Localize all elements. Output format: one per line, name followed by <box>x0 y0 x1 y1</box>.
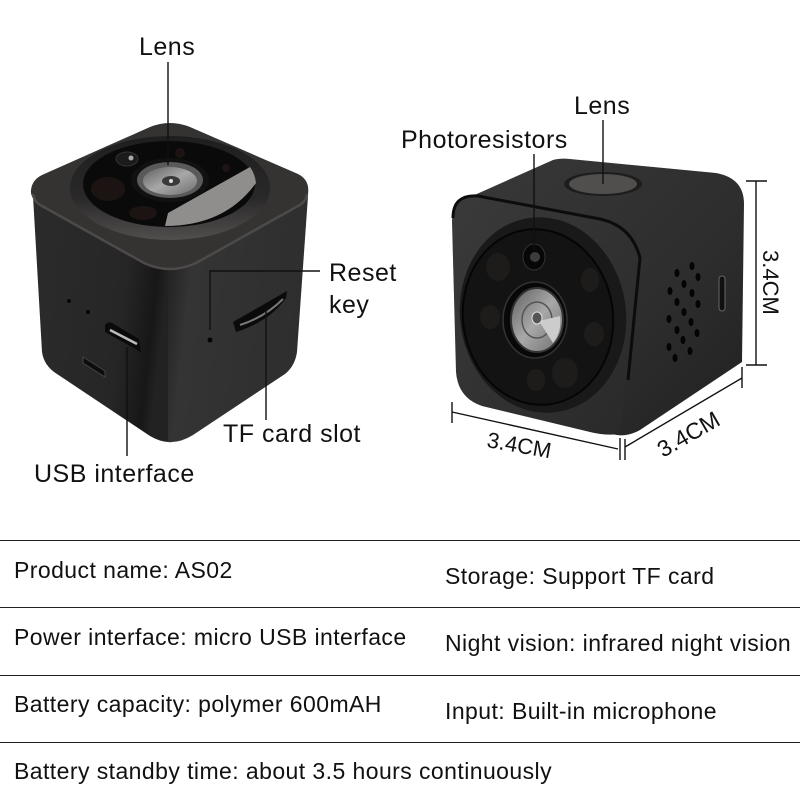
spec: battery capacity: Battery capacity: polymer 600mAH <box>14 691 382 717</box>
left camera: infrared LEDs <box>91 148 230 220</box>
label: Reset key: Reset <box>329 259 397 287</box>
right camera: front top edge <box>453 196 640 380</box>
right camera: top lens window <box>564 172 642 196</box>
right camera: side slot <box>719 276 725 311</box>
left camera: photoresistor <box>116 152 138 166</box>
product diagrams <box>30 33 783 488</box>
right camera: speaker holes <box>666 262 700 362</box>
left camera: lower port <box>83 357 105 377</box>
dimension: width: 3.4CM <box>485 427 553 463</box>
right camera: infrared LEDs <box>480 253 604 391</box>
left camera: top face <box>31 123 308 268</box>
specification table <box>0 540 800 784</box>
spec: night vision: Night vision: infrared night vision <box>445 630 791 656</box>
label: TF card slot: TF card slot <box>223 420 361 448</box>
dimension lines <box>452 181 767 460</box>
left camera: isometric view <box>31 123 308 442</box>
spec: input: Input: Built-in microphone <box>445 698 717 724</box>
left camera: left side face <box>33 196 172 442</box>
right camera: front face <box>452 196 640 435</box>
leader lines <box>127 62 603 456</box>
left camera: USB slot <box>105 322 141 352</box>
right camera: front lens ring <box>447 206 639 424</box>
dimension: height: 3.4CM <box>758 250 783 315</box>
dimension: depth: 3.4CM <box>652 406 724 462</box>
label: Reset key: key <box>329 291 369 319</box>
spec: storage: Storage: Support TF card <box>445 563 714 589</box>
label: Lens (right): Lens <box>574 92 630 120</box>
left camera: lens ring <box>70 136 270 240</box>
left camera: glass reflection <box>165 167 256 226</box>
label: Photoresistors: Photoresistors <box>401 126 568 154</box>
label: Lens (left): Lens <box>139 33 195 61</box>
spec: product name: Product name: AS02 <box>14 557 233 583</box>
left camera: pinholes and reset hole <box>67 299 71 303</box>
right camera: lens <box>503 282 567 358</box>
label: USB interface: USB interface <box>34 460 195 488</box>
spec: standby time: Battery standby time: about 3.5 hours continuously <box>14 758 552 784</box>
left camera: right side face <box>168 196 308 442</box>
left camera: TF card slot <box>233 291 287 332</box>
left camera: lens <box>131 158 209 202</box>
spec: power interface: Power interface: micro USB interface <box>14 624 407 650</box>
right camera: photoresistor <box>523 244 545 270</box>
right camera: side and top body <box>470 159 744 435</box>
right camera: angled view <box>447 159 744 435</box>
left camera: glass panel <box>83 141 255 227</box>
left camera: top face bevel <box>33 194 307 269</box>
